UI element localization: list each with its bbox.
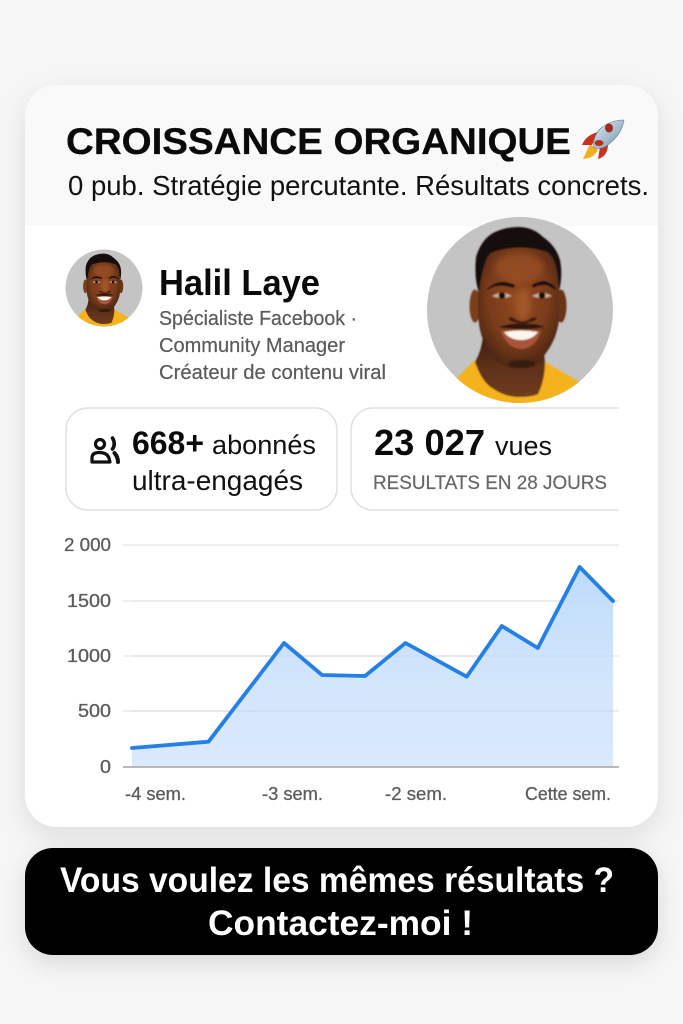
y axis labels: 0 (100, 756, 111, 777)
views period: RESULTATS EN 28 JOURS (373, 472, 607, 494)
views label: vues (495, 431, 552, 461)
small avatar (65, 249, 143, 334)
subtitle: 0 pub. Stratégie percutante. Résultats concrets. (68, 170, 649, 201)
area chart (64, 534, 619, 804)
call to action line 2: Contactez-moi ! (208, 904, 473, 943)
icon: people (92, 438, 118, 462)
views value: 23 027 (374, 422, 485, 463)
chart area (132, 567, 613, 767)
followers label: abonnés (212, 430, 316, 460)
role text: Créateur de contenu viral (159, 361, 386, 384)
panel: header band (25, 85, 658, 226)
x axis labels: Cette sem. (525, 783, 611, 804)
icon: rocket (582, 120, 624, 159)
followers label line 2: ultra-engagés (132, 465, 303, 496)
y axis labels: 1500 (67, 590, 111, 611)
role text: Community Manager (159, 334, 345, 357)
role text: Spécialiste Facebook · (159, 307, 357, 330)
y axis labels: 1000 (67, 645, 111, 666)
panel: main card (25, 85, 658, 827)
x axis labels: -3 sem. (262, 783, 323, 804)
name: Halil Laye (159, 262, 320, 303)
x axis labels (125, 783, 611, 804)
y axis labels (64, 534, 111, 777)
large avatar (427, 217, 613, 420)
title: CROISSANCE ORGANIQUE (66, 121, 571, 162)
call to action line 1: Vous voulez les mêmes résultats ? (60, 861, 614, 900)
panel: views stat (351, 408, 619, 510)
chart line (132, 567, 613, 748)
followers value: 668+ (132, 425, 204, 461)
call to action (25, 848, 658, 955)
y axis labels: 500 (78, 700, 111, 721)
x axis labels: -2 sem. (385, 783, 447, 804)
x axis labels: -4 sem. (125, 783, 186, 804)
role text (159, 307, 386, 384)
panel: followers stat (66, 408, 337, 510)
y axis labels: 2 000 (64, 534, 111, 555)
